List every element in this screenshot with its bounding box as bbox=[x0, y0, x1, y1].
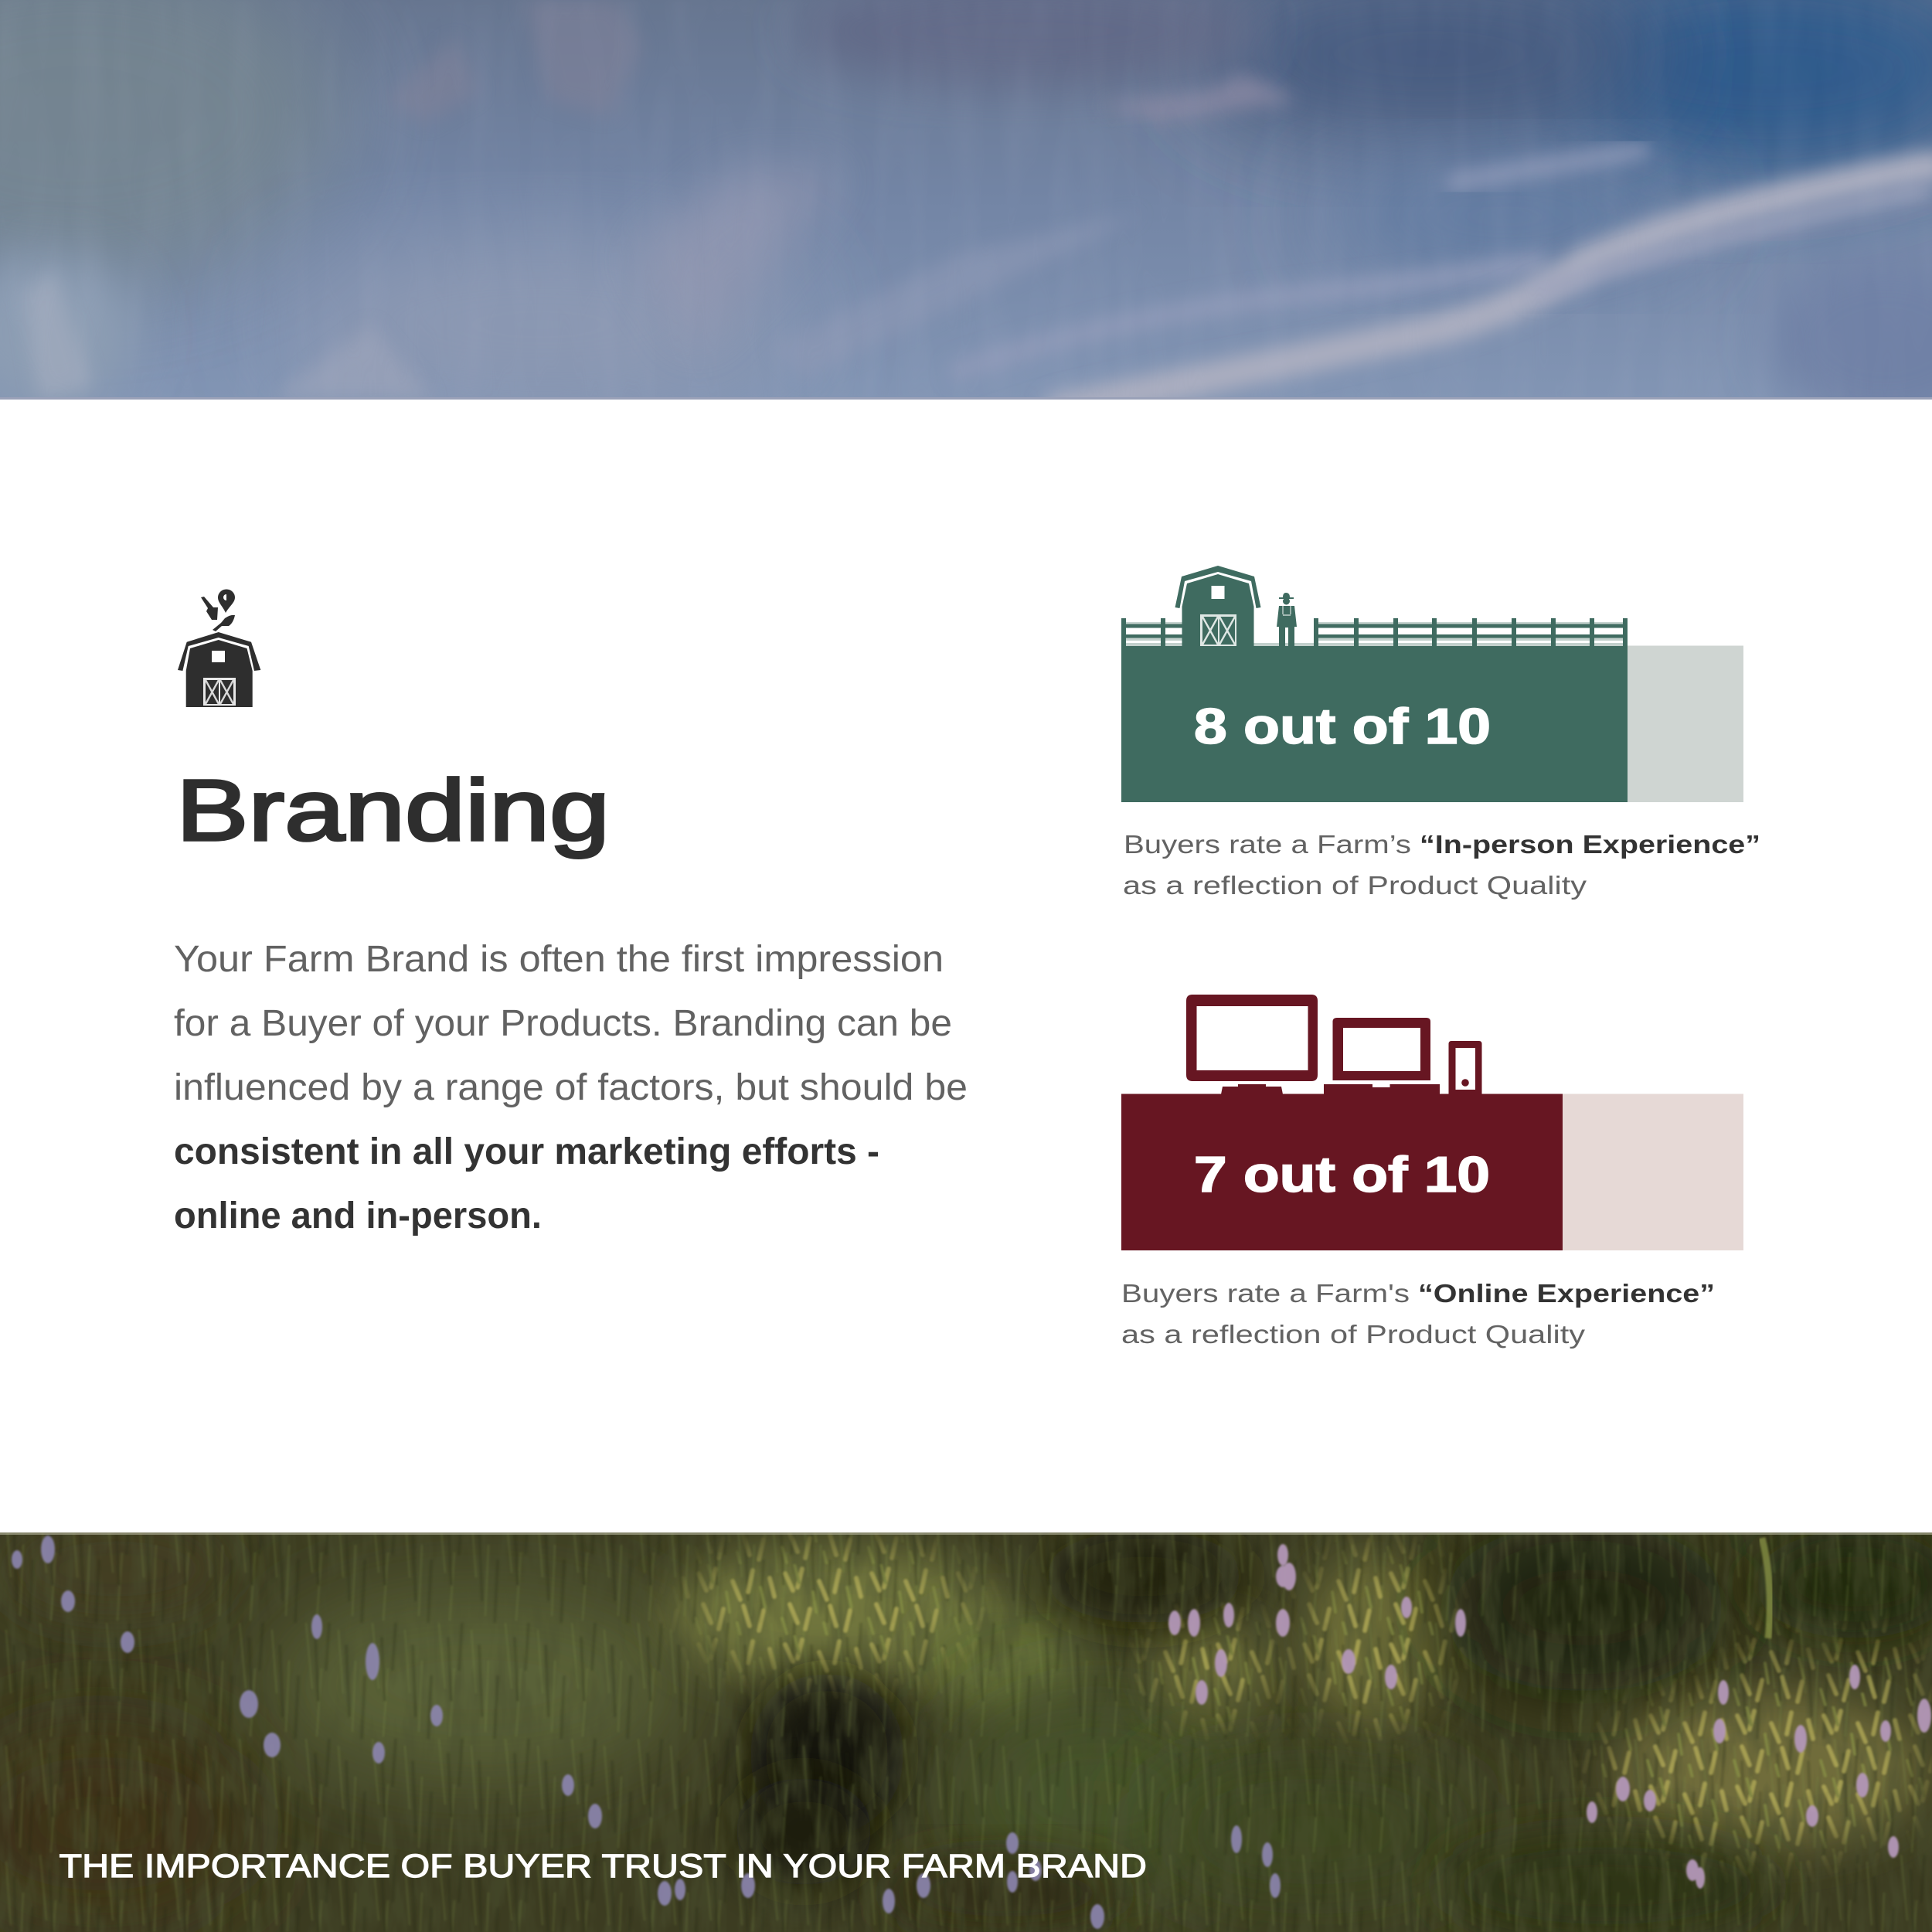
bar remainder bbox=[1628, 646, 1743, 802]
heading: Branding bbox=[176, 762, 610, 859]
streaks bbox=[1453, 151, 1642, 182]
photo: sky banner bbox=[0, 0, 1932, 425]
bar remainder bbox=[1563, 1094, 1743, 1250]
illustration: barn bbox=[1175, 566, 1261, 647]
body text bbox=[174, 939, 968, 1236]
caption: in-person experience bbox=[1123, 830, 1760, 900]
sunlit stalks bbox=[674, 1535, 1932, 1875]
bar value bbox=[1121, 1094, 1563, 1250]
icon: barn body bbox=[186, 640, 253, 707]
icon: map pin bbox=[218, 589, 235, 613]
body text: consistent in all your marketing efforts - bbox=[174, 1131, 879, 1172]
grass texture bbox=[0, 1532, 1932, 1932]
body text: for a Buyer of your Products. Branding can be bbox=[174, 1003, 952, 1044]
bar label: 7 out of 10 bbox=[1194, 1146, 1490, 1202]
chart: online experience bar bbox=[1121, 995, 1743, 1250]
caption: in-person experience: as a reflection of Product Quality bbox=[1123, 871, 1587, 900]
caption: online experience: “Online Experience” bbox=[1418, 1279, 1715, 1308]
body text: online and in-person. bbox=[174, 1196, 542, 1236]
broad tones bbox=[0, 1740, 243, 1907]
illustration: farmer bbox=[1277, 593, 1297, 646]
footer title: THE IMPORTANCE OF BUYER TRUST IN YOUR FARM BRAND bbox=[59, 1848, 1147, 1885]
small cloud bbox=[1097, 73, 1298, 122]
chart: in-person experience bar bbox=[1121, 566, 1743, 802]
icon: barn with branding symbols bbox=[178, 589, 260, 707]
icon: laptop bbox=[1324, 1018, 1440, 1094]
icon: barn window bbox=[212, 651, 225, 662]
icon: barn door bbox=[203, 678, 236, 706]
icon: phone bbox=[1448, 1041, 1482, 1094]
bar value bbox=[1121, 646, 1628, 802]
flowers bbox=[12, 1536, 1281, 1929]
photo: meadow banner bbox=[0, 1515, 1932, 1932]
caption: online experience: as a reflection of Product Quality bbox=[1121, 1320, 1586, 1349]
caption: online experience bbox=[1121, 1279, 1715, 1349]
caption: in-person experience: Buyers rate a Farm’s bbox=[1124, 830, 1411, 859]
upper lobes bbox=[532, 2, 635, 105]
caption: in-person experience: “In-person Experience” bbox=[1420, 830, 1760, 859]
icon: brush bbox=[201, 597, 218, 620]
icon: leaf bbox=[213, 615, 235, 631]
body text: influenced by a range of factors, but should be bbox=[174, 1067, 968, 1108]
body text: Your Farm Brand is often the first impression bbox=[174, 939, 944, 980]
bar label: 8 out of 10 bbox=[1194, 698, 1491, 754]
icon: desktop monitor bbox=[1186, 995, 1318, 1094]
icon: barn roof bbox=[178, 632, 260, 671]
centre wisps bbox=[663, 161, 827, 287]
soft texture bbox=[0, 0, 1932, 400]
illustration: fence bbox=[1121, 618, 1628, 646]
caption: online experience: Buyers rate a Farm's bbox=[1121, 1279, 1410, 1308]
